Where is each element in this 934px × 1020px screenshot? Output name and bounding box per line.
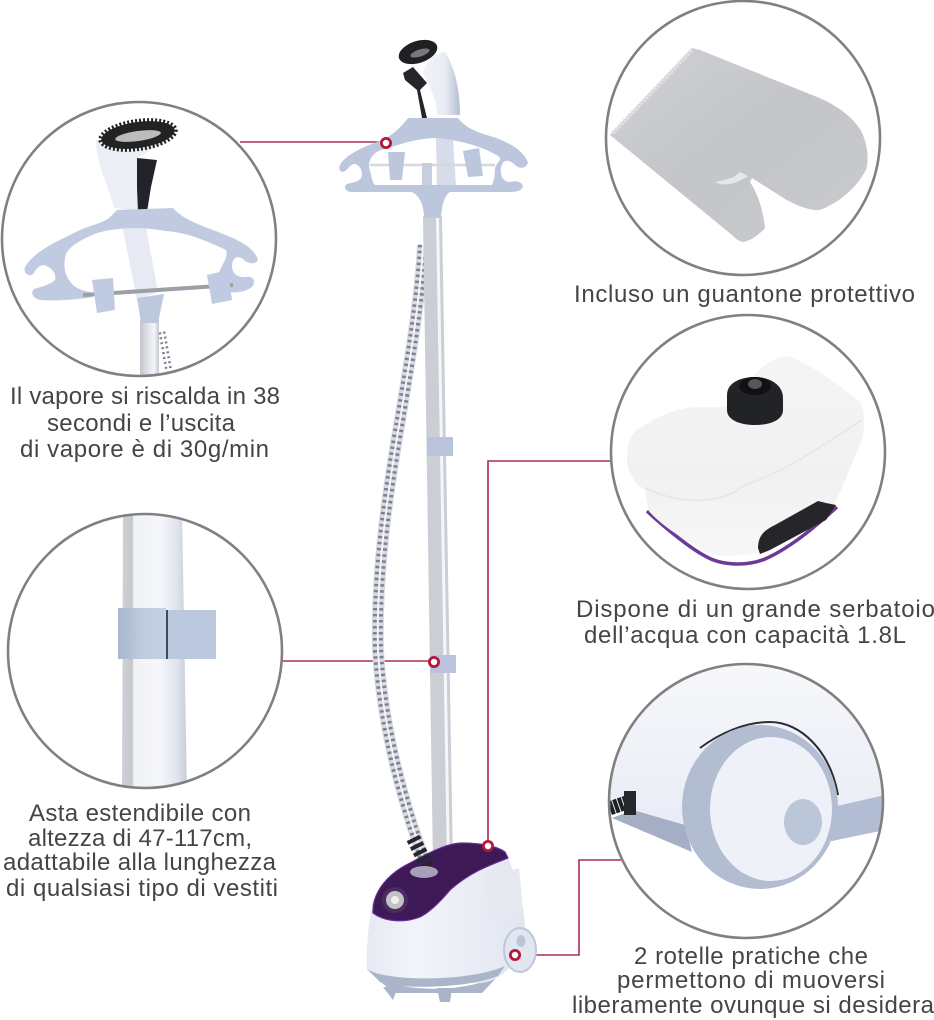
left clip: [92, 278, 115, 313]
caption: water tank: Dispone di un grande serbatoio: [576, 596, 934, 623]
rear mast behind hanger: [436, 135, 456, 190]
marker: wheel: [510, 950, 520, 960]
product: garment steamer: [339, 35, 536, 1002]
machine body: [600, 660, 890, 825]
extension pole: [140, 320, 159, 380]
pole clip lower: [430, 655, 456, 673]
steam head handle: [137, 158, 157, 212]
marker: tank: [483, 841, 493, 851]
pole behind hanger: [122, 228, 158, 300]
black cap: [727, 377, 783, 425]
hanger: [24, 208, 258, 300]
base body: [367, 858, 525, 983]
chrome bar: [83, 285, 233, 295]
hose cuff: [410, 838, 438, 878]
caption: glove: Incluso un guantone protettivo: [574, 281, 915, 308]
power cord: [610, 791, 636, 815]
caption: water tank: dell’acqua con capacità 1.8L: [584, 622, 906, 649]
pole tube: [122, 510, 187, 795]
hose: [378, 245, 424, 860]
caption: wheels: permettono di muoversi: [617, 967, 885, 994]
marker: pole: [429, 657, 439, 667]
caption: steam heating: di vapore è di 30g/min: [20, 436, 269, 463]
caption: extendable pole: Asta estendibile con: [29, 800, 251, 827]
wheel hub: [784, 799, 822, 845]
caption: extendable pole: di qualsiasi tipo di vestiti: [6, 875, 278, 902]
steam head body: [96, 140, 168, 212]
wheel: [504, 928, 536, 972]
foot centre: [437, 988, 452, 1002]
tank body: [627, 356, 864, 556]
central clip: [422, 163, 432, 185]
mast in hanger opening: [437, 138, 456, 185]
connector: wheel detail: [515, 860, 621, 955]
hanger stem: [137, 294, 164, 323]
hanger: [339, 118, 528, 218]
glove highlight: [715, 172, 748, 184]
chrome bar: [370, 164, 495, 166]
caption: extendable pole: altezza di 47-117cm,: [28, 825, 252, 852]
grey base right: [831, 796, 882, 841]
tank lid seam: [645, 420, 862, 500]
pole clip: [118, 608, 216, 659]
caption: wheels: liberamente ovunque si desidera: [572, 992, 934, 1019]
panel: protective glove: [606, 1, 880, 275]
connector: pole detail: [282, 660, 434, 662]
grey base left: [612, 810, 692, 852]
base underside: [378, 976, 498, 993]
wheel rim: [682, 725, 838, 889]
caption: steam heating: secondi e l’uscita: [47, 410, 236, 437]
pole clip upper: [427, 437, 453, 456]
caption: steam heating: [10, 383, 280, 463]
window panel: [484, 868, 523, 917]
purple base edge: [647, 507, 837, 564]
caption: steam heating: Il vapore si riscalda in 38: [10, 383, 280, 410]
panel: hanger and steam head detail: [2, 102, 276, 380]
telescopic pole: [423, 216, 453, 865]
caption: water tank: [576, 596, 934, 649]
wheel face: [710, 737, 832, 881]
control knob: [382, 887, 408, 913]
panel: water tank: [611, 315, 885, 589]
panel: extendable pole: [8, 510, 282, 795]
glove: [610, 48, 868, 242]
caption: extendable pole: [3, 800, 278, 902]
caption: wheels: [572, 943, 934, 1019]
purple top cover: [373, 843, 508, 921]
wheel arch shadow: [700, 722, 838, 795]
foot left: [383, 986, 398, 1000]
marker: hanger: [381, 138, 391, 148]
brush head: [98, 118, 178, 152]
connector: water tank detail: [488, 461, 610, 846]
steam head: [396, 35, 460, 118]
caption: wheels: 2 rotelle pratiche che: [634, 943, 868, 970]
garment clip right: [463, 148, 483, 177]
garment clip left: [388, 152, 405, 180]
black slot: [758, 501, 836, 554]
hose fragment: [162, 332, 170, 378]
right clip: [207, 270, 232, 304]
connector: hanger detail: [240, 141, 386, 143]
grey base band: [367, 966, 505, 987]
caption: extendable pole: adattabile alla lunghezza: [3, 849, 277, 876]
glove binding: [612, 50, 692, 134]
panel: wheels: [600, 660, 890, 938]
